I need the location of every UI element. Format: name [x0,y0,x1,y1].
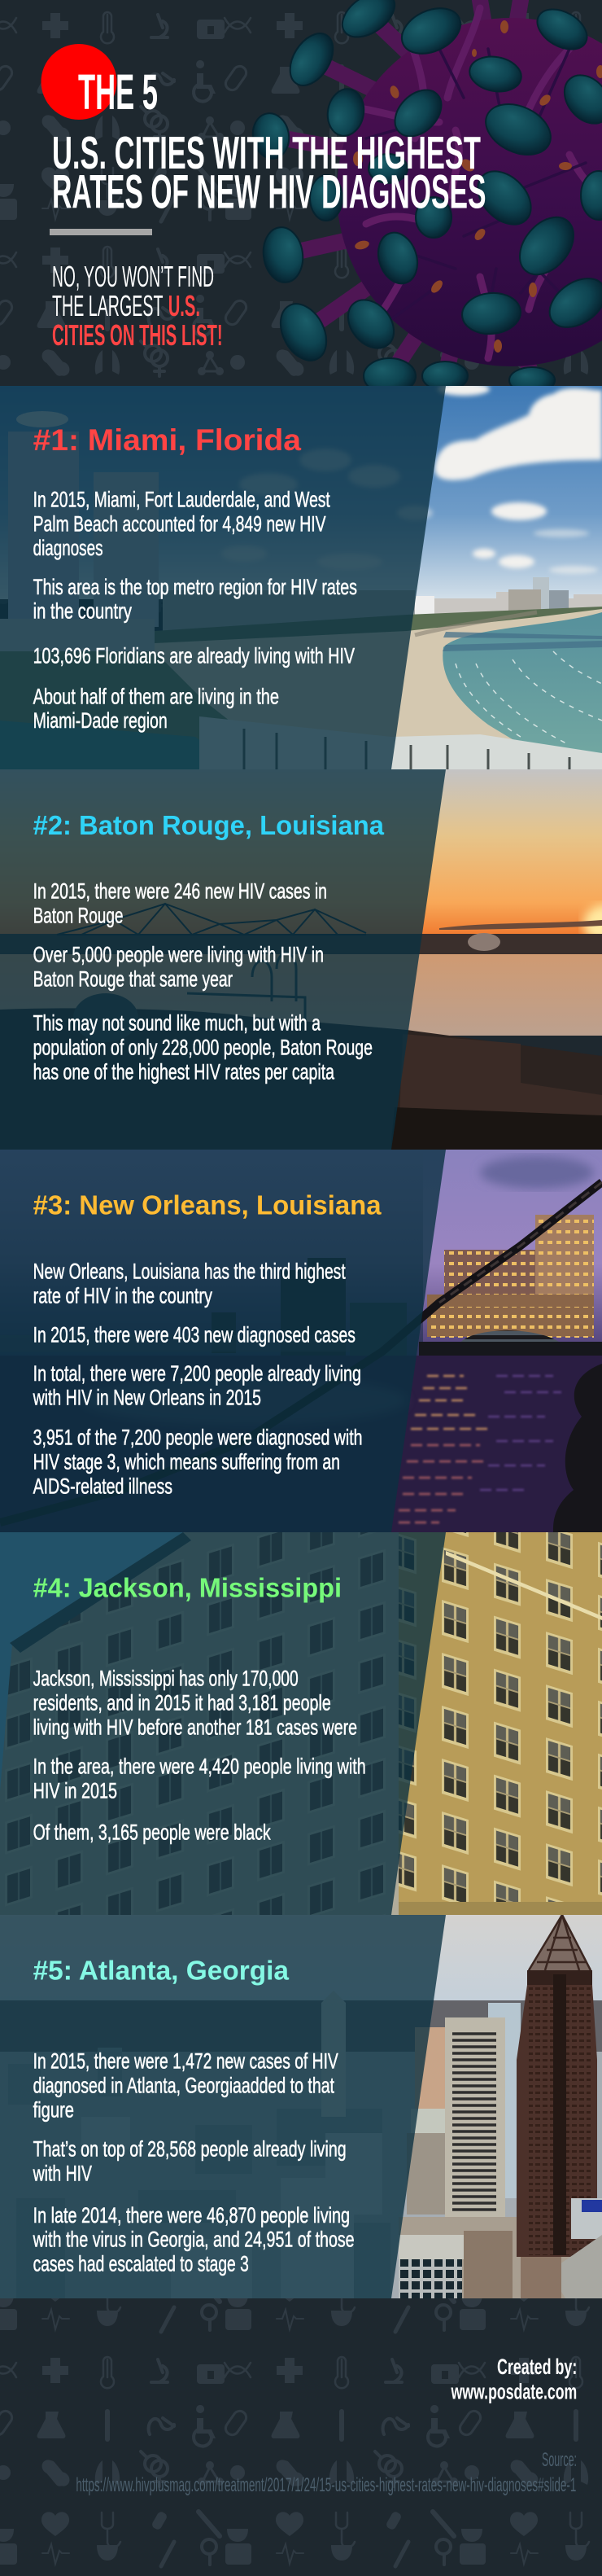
title: the 5: THE 5 [78,64,158,120]
text block: with HIV in New Orleans in 2015 [33,1386,261,1410]
text block: That’s on top of 28,568 people already living [33,2137,347,2162]
overlay panel [0,769,446,1150]
text block: diagnoses [33,536,103,560]
source [76,2449,577,2496]
panel: #3 New Orleans [0,1150,602,1532]
subtitle: THE LARGEST [52,289,163,322]
text block: has one of the highest HIV rates per capita [33,1060,335,1084]
text block: In 2015, there were 1,472 new cases of HIV [33,2049,338,2074]
photo: Miami beach [0,383,602,769]
text block: residents, and in 2015 it had 3,181 people [33,1690,331,1715]
overlay panel [0,1532,446,1915]
panel: #5 Atlanta [0,1915,602,2298]
text block: In the area, there were 4,420 people living with [33,1754,366,1778]
text block: diagnosed in Atlanta, Georgiaadded to that [33,2074,334,2098]
text block: cases had escalated to stage 3 [33,2251,249,2276]
text block: in the country [33,599,132,624]
text block: with HIV [33,2161,92,2185]
panel: footer [76,2355,577,2496]
text block: AIDS-related illness [33,1474,172,1498]
photo: New Orleans riverfront [0,1150,602,1532]
text block: Baton Rouge [33,903,124,927]
photo: Baton Rouge sunset [0,769,602,1150]
text block: New Orleans, Louisiana has the third highest [33,1260,346,1284]
illustration: purple virus [249,0,602,394]
text block: 103,696 Floridians are already living with HIV [33,644,355,668]
text block [33,1260,362,1498]
text block: In 2015, Miami, Fort Lauderdale, and West [33,488,330,512]
text block: HIV stage 3, which means suffering from an [33,1450,340,1474]
panel: #2 Baton Rouge [0,769,602,1150]
text block [33,879,373,1084]
panel: header [41,0,602,394]
text block: This area is the top metro region for HIV rates [33,575,357,599]
text block: This may not sound like much, but with a [33,1011,321,1036]
text block: In total, there were 7,200 people already living [33,1361,361,1386]
panel: #1 Miami [0,383,602,769]
credit [451,2355,577,2404]
text block: living with HIV before another 181 cases were [33,1715,357,1739]
heading: #4: Jackson, Mississippi [33,1573,342,1603]
subtitle: NO, YOU WON’T FIND [52,260,214,293]
text block: Over 5,000 people were living with HIV in [33,943,324,967]
subtitle [52,265,221,345]
text block: rate of HIV in the country [33,1284,212,1308]
text block: population of only 228,000 people, Baton Rouge [33,1036,373,1060]
text block: figure [33,2097,74,2122]
text block: Baton Rouge that same year [33,967,233,992]
overlay panel [0,1150,446,1532]
heading: #5: Atlanta, Georgia [33,1956,290,1986]
text block: with the virus in Georgia, and 24,951 of those [33,2228,355,2252]
text block: HIV in 2015 [33,1778,117,1803]
heading: #3: New Orleans, Louisiana [33,1190,382,1220]
overlay panel [0,386,446,769]
text block [33,2049,355,2276]
text block: In 2015, there were 246 new HIV cases in [33,879,327,904]
heading: #1: Miami, Florida [33,423,301,457]
text block [33,1667,366,1845]
text block: Palm Beach accounted for 4,849 new HIV [33,512,326,537]
overlay panel [0,1915,446,2298]
text block: Miami-Dade region [33,708,168,733]
heading: #2: Baton Rouge, Louisiana [33,810,385,840]
subtitle: CITIES ON THIS LIST! [52,318,223,352]
text block: Jackson, Mississippi has only 170,000 [33,1667,299,1691]
text block: In 2015, there were 403 new diagnosed cases [33,1323,356,1347]
photo: Atlanta skyline [0,1915,602,2298]
panel: #4 Jackson [0,1532,602,1915]
text block: 3,951 of the 7,200 people were diagnosed with [33,1426,362,1450]
text block: In late 2014, there were 46,870 people living [33,2203,350,2228]
divider bar [50,229,152,235]
text block: About half of them are living in the [33,685,279,709]
red circle [41,44,117,120]
photo: Jackson building [0,1532,602,1915]
text block: Of them, 3,165 people were black [33,1820,271,1845]
text block [33,488,357,733]
subtitle: U.S. [168,289,200,322]
